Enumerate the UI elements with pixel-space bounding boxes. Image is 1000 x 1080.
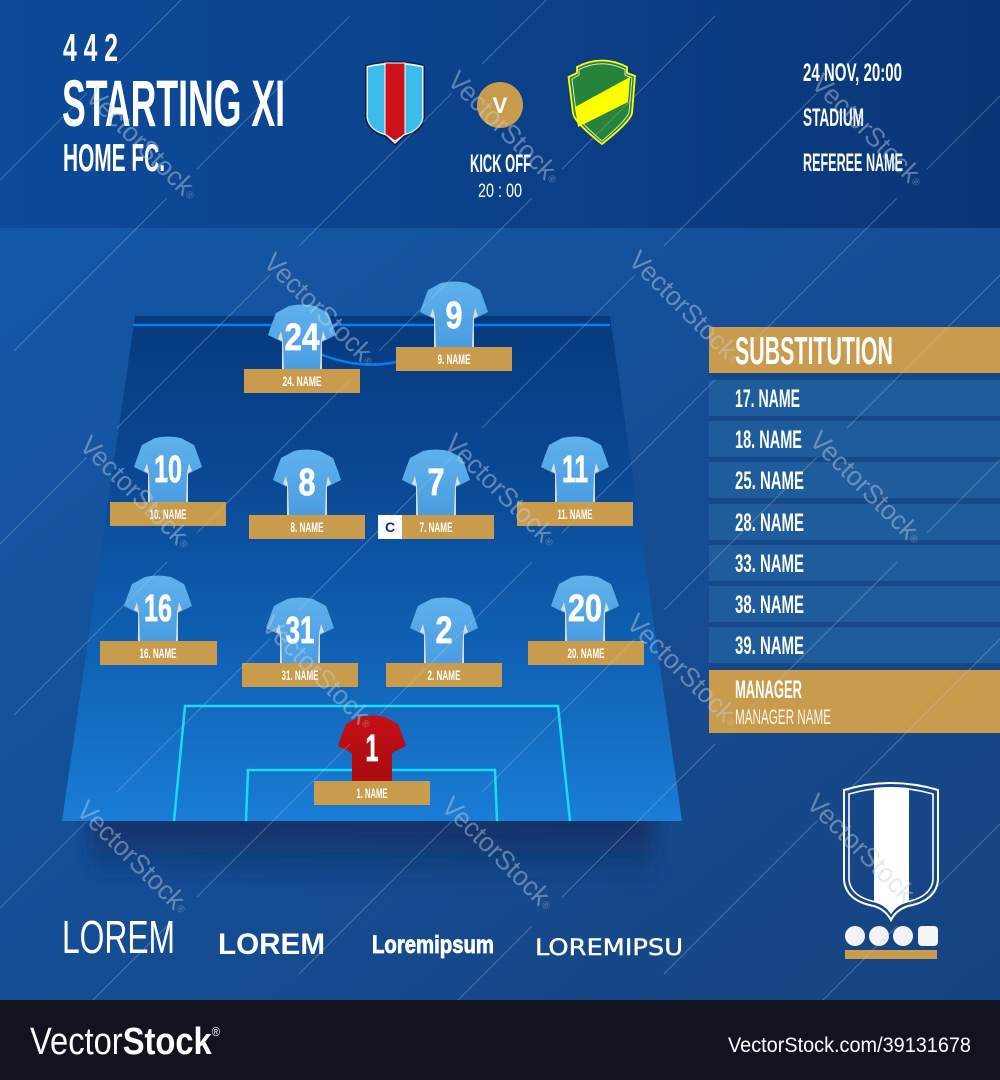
player 11: 11. NAME <box>558 506 592 522</box>
watermarks: VectorStock <box>74 430 197 553</box>
sub 38 <box>709 586 1000 622</box>
watermarks: VectorStock <box>442 65 565 188</box>
player 2: 2 <box>436 610 452 652</box>
player 16: 16 <box>144 588 172 630</box>
sub 39: 39. NAME <box>735 632 804 660</box>
goalkeeper 1: 1. NAME <box>356 785 388 801</box>
sponsor logo 4: LOREMIPSU <box>535 936 683 961</box>
watermarks: VectorStock <box>71 795 194 918</box>
player 11: 11 <box>562 449 588 491</box>
watermarks: ® <box>726 353 739 366</box>
sub 18 <box>709 421 1000 457</box>
icon: crest dots and bar <box>845 926 938 959</box>
player 20: 20 <box>568 588 602 630</box>
referee: REFEREE NAME <box>803 149 903 177</box>
pitch shadow <box>90 812 655 884</box>
manager block: MANAGER <box>735 676 802 704</box>
sub 18: 18. NAME <box>735 426 802 454</box>
panel: substitution list <box>709 327 1000 733</box>
kick off label: KICK OFF <box>470 150 531 178</box>
player 8: 8. NAME <box>290 519 324 535</box>
player 9: 9. NAME <box>438 351 470 367</box>
watermarks: VectorStock <box>436 791 559 914</box>
sub 28: 28. NAME <box>735 509 804 537</box>
player 8: 8 <box>298 462 316 504</box>
manager block <box>709 670 1000 733</box>
header band <box>0 0 1000 228</box>
player 7 captain <box>378 450 494 539</box>
watermarks: VectorStock <box>621 608 744 731</box>
watermarks: VectorStock <box>806 68 929 191</box>
footer logo: VectorStock <box>30 1021 226 1063</box>
icon: league crest <box>844 783 938 920</box>
watermarks: ® <box>904 896 917 909</box>
kick off time: 20 : 00 <box>478 181 522 202</box>
player 16: 16. NAME <box>140 645 176 661</box>
icon: away team crest <box>568 60 635 144</box>
player 31: 31. NAME <box>282 667 318 683</box>
watermarks <box>71 65 931 921</box>
watermarks: ® <box>909 176 922 189</box>
watermarks: VectorStock <box>256 610 379 733</box>
watermarks: ® <box>542 536 555 549</box>
watermarks: ® <box>724 716 737 729</box>
sub 38: 38. NAME <box>735 591 804 619</box>
player 7 captain: 7 <box>428 462 444 504</box>
watermarks: VectorStock <box>623 245 746 368</box>
player 31: 31 <box>286 610 314 652</box>
watermarks: ® <box>177 538 190 551</box>
goalkeeper 1 <box>314 716 430 805</box>
player 7 captain: 7. NAME <box>420 519 452 535</box>
watermarks: ® <box>361 355 374 368</box>
player 24: 24. NAME <box>282 373 322 389</box>
player 31 <box>242 598 358 687</box>
pitch <box>62 316 682 821</box>
footer url: VectorStock.com/39131678 <box>728 1034 971 1057</box>
player 2 <box>386 598 502 687</box>
sub 25 <box>709 462 1000 498</box>
player 16 <box>100 576 217 665</box>
watermarks: ® <box>183 189 196 202</box>
sub 17: 17. NAME <box>735 385 800 413</box>
player 20 <box>528 576 644 665</box>
watermarks: VectorStock <box>80 81 203 204</box>
player 24 <box>244 304 360 393</box>
watermarks: ® <box>907 533 920 546</box>
watermarks: ® <box>359 718 372 731</box>
player 7 captain: C <box>385 519 395 535</box>
player 11 <box>517 436 633 526</box>
player 2: 2. NAME <box>428 667 460 683</box>
watermarks: ® <box>174 903 187 916</box>
icon: versus badge <box>477 82 523 128</box>
player 9 <box>396 282 512 371</box>
sub 33: 33. NAME <box>735 550 804 578</box>
sponsor logo 1: LOREM <box>62 911 175 963</box>
sub 28 <box>709 504 1000 540</box>
footer bar <box>0 1000 1000 1080</box>
goalkeeper 1: 1 <box>366 728 378 770</box>
sub 17 <box>709 380 1000 416</box>
sponsor logo 2: LOREM <box>218 928 325 961</box>
sub 25: 25. NAME <box>735 467 804 495</box>
sub 39 <box>709 627 1000 663</box>
player 9: 9 <box>446 295 462 337</box>
match date: 24 NOV, 20:00 <box>803 59 902 87</box>
sub 33 <box>709 545 1000 581</box>
main title: STARTING XI <box>62 66 285 140</box>
icon: versus badge: V <box>493 93 508 118</box>
player 8 <box>249 450 365 539</box>
watermarks: VectorStock <box>801 788 924 911</box>
player 24: 24 <box>284 317 320 359</box>
player 10: 10 <box>154 449 182 491</box>
footer logo: ® <box>212 1024 220 1039</box>
watermarks: VectorStock <box>439 428 562 551</box>
stadium: STADIUM <box>803 104 864 132</box>
watermarks: VectorStock <box>258 247 381 370</box>
watermarks: ® <box>539 899 552 912</box>
player 10 <box>110 436 226 526</box>
sponsor logo 3: Loremipsum <box>372 931 494 959</box>
watermarks: VectorStock <box>804 425 927 548</box>
manager block: MANAGER NAME <box>735 706 831 729</box>
page background <box>0 228 1000 1000</box>
formation: 4 4 2 <box>63 27 118 70</box>
icon: home team crest <box>365 61 425 146</box>
team name: HOME FC. <box>63 137 165 180</box>
player 10: 10. NAME <box>150 506 186 522</box>
watermarks: ® <box>545 173 558 186</box>
player 20: 20. NAME <box>568 645 604 661</box>
